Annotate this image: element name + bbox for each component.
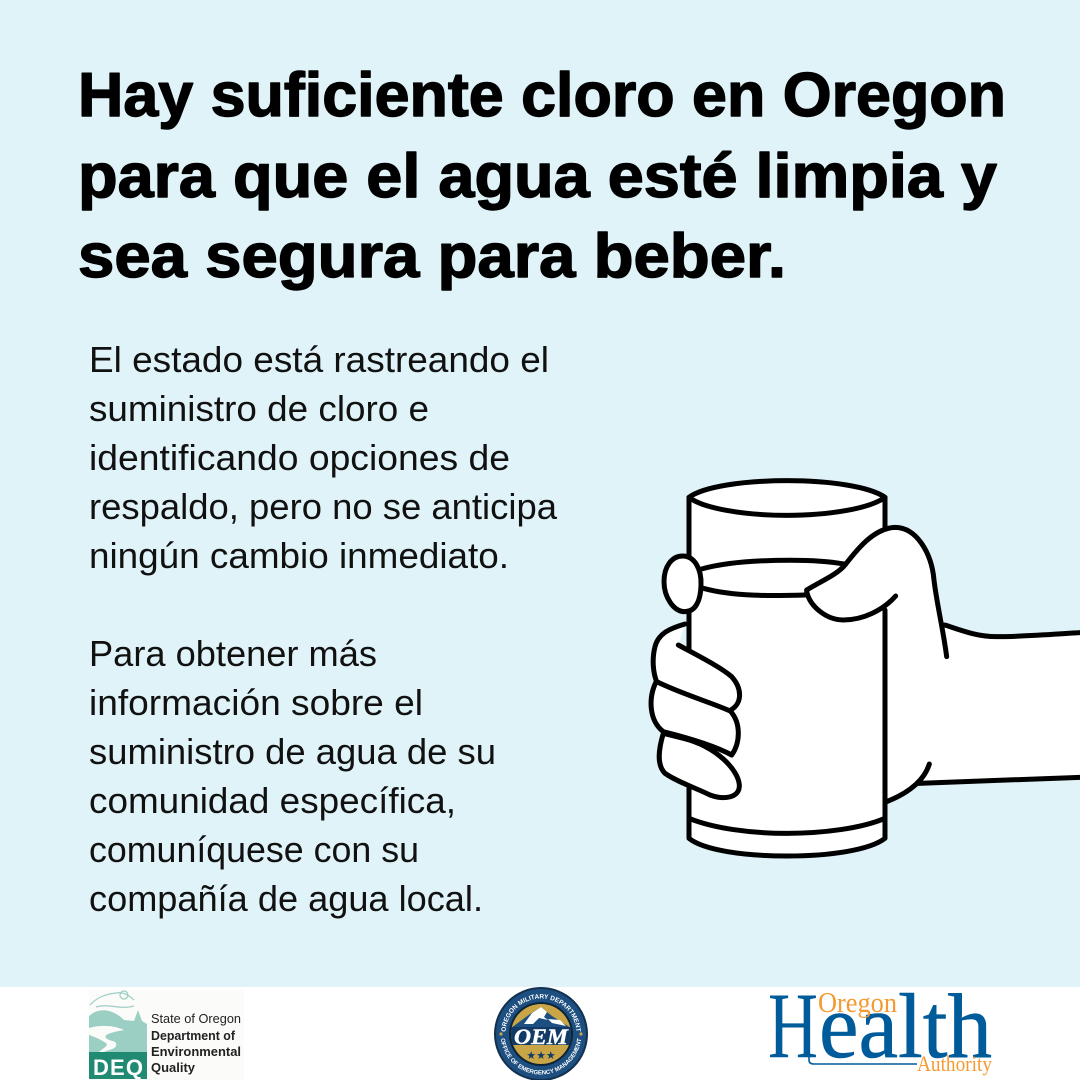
DEQ landscape — [89, 991, 147, 1052]
title — [78, 61, 1006, 291]
logo: Oregon Office of Emergency Management seal: OREGON MILITARY DEPARTMENT — [501, 994, 581, 1032]
logo: State of Oregon DEQ: State of Oregon — [151, 1011, 241, 1026]
text block: supply tracking: respaldo, pero no se anticipa — [89, 486, 558, 527]
title: Hay suficiente cloro en Oregon — [78, 61, 1006, 130]
text block: supply tracking: ningún cambio inmediato. — [89, 535, 509, 576]
DEQ badge — [89, 1052, 147, 1079]
logo: State of Oregon DEQ: Quality — [151, 1060, 196, 1075]
text block: more information: Para obtener más — [89, 633, 377, 674]
arm and thumb — [807, 527, 1080, 803]
logo: Oregon Office of Emergency Management seal: OEM — [514, 1024, 570, 1049]
title: sea segura para beber. — [78, 222, 786, 291]
title: para que el agua esté limpia y — [78, 142, 998, 211]
logo: Oregon Health Authority: H — [768, 974, 818, 1078]
logo: Oregon Health Authority: Authority — [917, 1051, 992, 1076]
fingers — [651, 624, 740, 798]
text block: supply tracking — [89, 339, 558, 576]
text block: supply tracking: suministro de cloro e — [89, 388, 429, 429]
text block: supply tracking: identificando opciones de — [89, 437, 510, 478]
logo: Oregon Health Authority: Oregon — [818, 987, 897, 1019]
logo: State of Oregon DEQ: Department of — [151, 1028, 236, 1043]
text block: more information — [89, 633, 496, 919]
text block: more information: suministro de agua de su — [89, 731, 496, 772]
logo: State of Oregon DEQ: Environmental — [151, 1044, 241, 1059]
text block: supply tracking: El estado está rastreando el — [89, 339, 549, 380]
icon: hand holding a glass of water — [651, 481, 1080, 856]
text block: more information: compañía de agua local. — [89, 878, 483, 919]
text block: more information: comuníquese con su — [89, 829, 419, 870]
logo: Oregon Office of Emergency Management seal — [494, 987, 588, 1080]
logo: State of Oregon DEQ — [89, 990, 244, 1080]
logo: State of Oregon DEQ: DEQ — [93, 1055, 143, 1080]
index fingertip — [664, 556, 701, 612]
glass — [689, 481, 885, 856]
logo: Oregon Office of Emergency Management seal: OFFICE OF EMERGENCY MANAGEMENT — [501, 1038, 582, 1074]
text block: more information: comunidad específica, — [89, 780, 456, 821]
text block: more information: información sobre el — [89, 682, 423, 723]
logo: Oregon Office of Emergency Management seal: ★★★ — [526, 1049, 556, 1062]
logo: Oregon Health Authority: ealth — [819, 975, 992, 1077]
